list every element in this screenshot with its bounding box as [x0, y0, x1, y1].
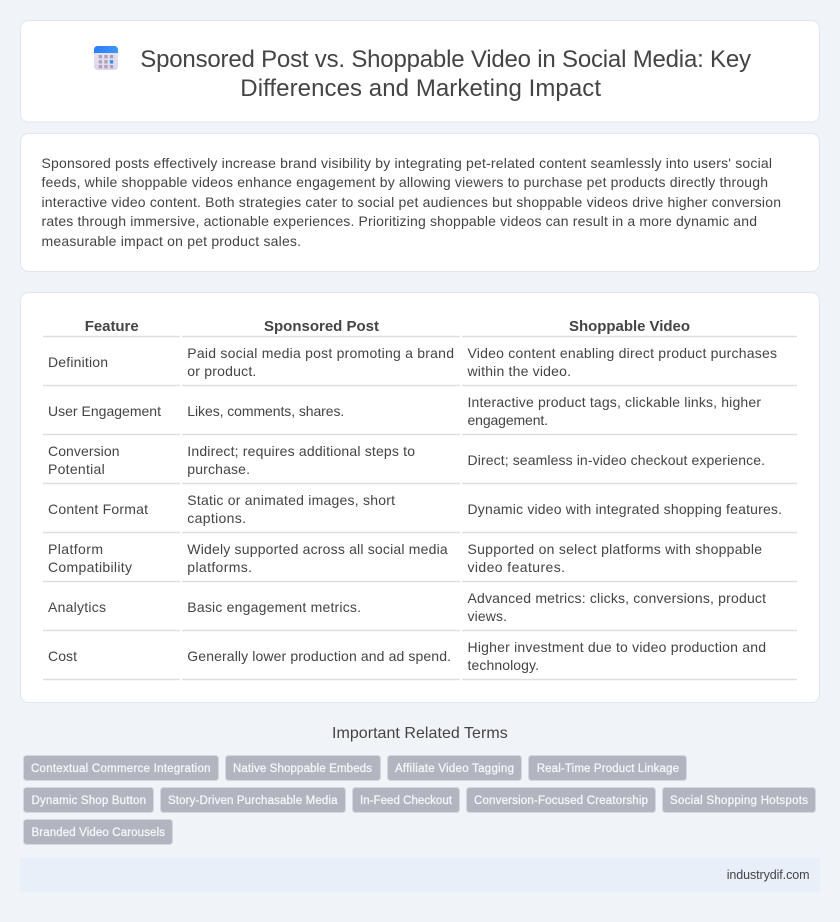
row: definition: Video content enabling direct product purchases [468, 345, 777, 361]
row: content format: Content Format [48, 501, 148, 517]
table header: Feature [85, 318, 139, 335]
row: analytics: views. [468, 608, 507, 624]
tag [24, 756, 218, 780]
row: content format: Static or animated images, short [187, 492, 395, 508]
row: cost: Generally lower production and ad spend. [187, 648, 451, 664]
tag: Contextual Commerce Integration [31, 763, 210, 775]
row: cost: Cost [48, 648, 77, 664]
table header: Shoppable Video [569, 318, 690, 335]
row: definition: Paid social media post promoting a brand [187, 345, 454, 361]
tag [160, 788, 346, 812]
row: platform compatibility: Supported on select platforms with shoppable [468, 541, 762, 557]
tag [662, 788, 816, 812]
row: definition [48, 345, 777, 379]
row: user engagement: Interactive product tags, clickable links, higher [468, 394, 761, 410]
row: content format: Dynamic video with integrated shopping features. [468, 501, 782, 517]
row: conversion potential: purchase. [187, 461, 250, 477]
panel: comparison table [20, 292, 820, 702]
text block: summary: interactive video content. Both strategies cater to social pet audiences but shoppable videos drive higher conversion [42, 194, 781, 210]
panel: header [20, 20, 820, 122]
row: user engagement: engagement. [468, 412, 548, 428]
tags: related terms [24, 756, 816, 844]
text block: summary [42, 155, 781, 249]
tag: Branded Video Carousels [32, 827, 165, 839]
row: user engagement: Likes, comments, shares. [187, 403, 344, 419]
row: conversion potential: Indirect; requires additional steps to [187, 443, 415, 459]
row: conversion potential [48, 443, 765, 477]
row: conversion potential: Potential [48, 461, 105, 477]
text block: summary: rates through immersive, actionable experiences. Prioritizing shoppable videos can result in a more dynamic and [42, 213, 757, 229]
row: definition: within the video. [466, 363, 571, 379]
tag [388, 756, 522, 780]
tag [226, 756, 380, 780]
row: platform compatibility: video features. [468, 559, 565, 575]
row: definition: or product. [187, 363, 256, 379]
footer [20, 858, 820, 892]
row: content format: captions. [187, 510, 246, 526]
row: platform compatibility: Compatibility [48, 559, 132, 575]
row: cost [48, 639, 766, 673]
tag: Story-Driven Purchasable Media [168, 795, 338, 807]
footer: industrydif.com [727, 868, 810, 882]
row: user engagement: User Engagement [48, 403, 161, 419]
text block: summary: feeds, while shoppable videos enhance engagement by allowing viewers to purchase pet products directly through [42, 174, 768, 190]
table header [85, 318, 690, 335]
tag: Social Shopping Hotspots [670, 795, 808, 807]
row: definition: Definition [48, 354, 108, 370]
row: analytics: Basic engagement metrics. [187, 599, 361, 615]
row: platform compatibility: Widely supported across all social media [187, 541, 448, 557]
row: platform compatibility: platforms. [187, 559, 252, 575]
tag: Affiliate Video Tagging [395, 763, 514, 775]
icon: calendar [94, 46, 118, 70]
row: user engagement [48, 394, 761, 428]
row: analytics [48, 590, 766, 624]
tag: In-Feed Checkout [360, 795, 453, 807]
tag [24, 788, 154, 812]
row: cost: Higher investment due to video production and [468, 639, 766, 655]
title: Differences and Marketing Impact [240, 75, 601, 102]
row: platform compatibility: Platform [48, 541, 103, 557]
tag [466, 788, 656, 812]
tag: Dynamic Shop Button [32, 795, 146, 807]
text block: summary: measurable impact on pet product sales. [42, 233, 301, 249]
tag: Real-Time Product Linkage [537, 763, 679, 775]
text block: summary: Sponsored posts effectively increase brand visibility by integrating pet-related content seamlessly into users' social [42, 155, 772, 171]
tag [528, 756, 686, 780]
row: conversion potential: Conversion [48, 443, 120, 459]
row: analytics: Advanced metrics: clicks, conversions, product [468, 590, 766, 606]
tag [24, 820, 172, 844]
heading: related terms: Important Related Terms [332, 725, 508, 742]
row: content format [48, 492, 782, 526]
row: platform compatibility [48, 541, 762, 575]
tag [352, 788, 460, 812]
title [140, 46, 751, 102]
table header: Sponsored Post [264, 318, 379, 335]
row: analytics: Analytics [48, 599, 106, 615]
tag: Conversion-Focused Creatorship [474, 795, 648, 807]
row: conversion potential: Direct; seamless in-video checkout experience. [468, 452, 765, 468]
tag: Native Shoppable Embeds [233, 763, 372, 775]
title: Sponsored Post vs. Shoppable Video in Social Media: Key [140, 46, 751, 73]
panel: description [20, 134, 820, 272]
row: cost: technology. [468, 657, 539, 673]
